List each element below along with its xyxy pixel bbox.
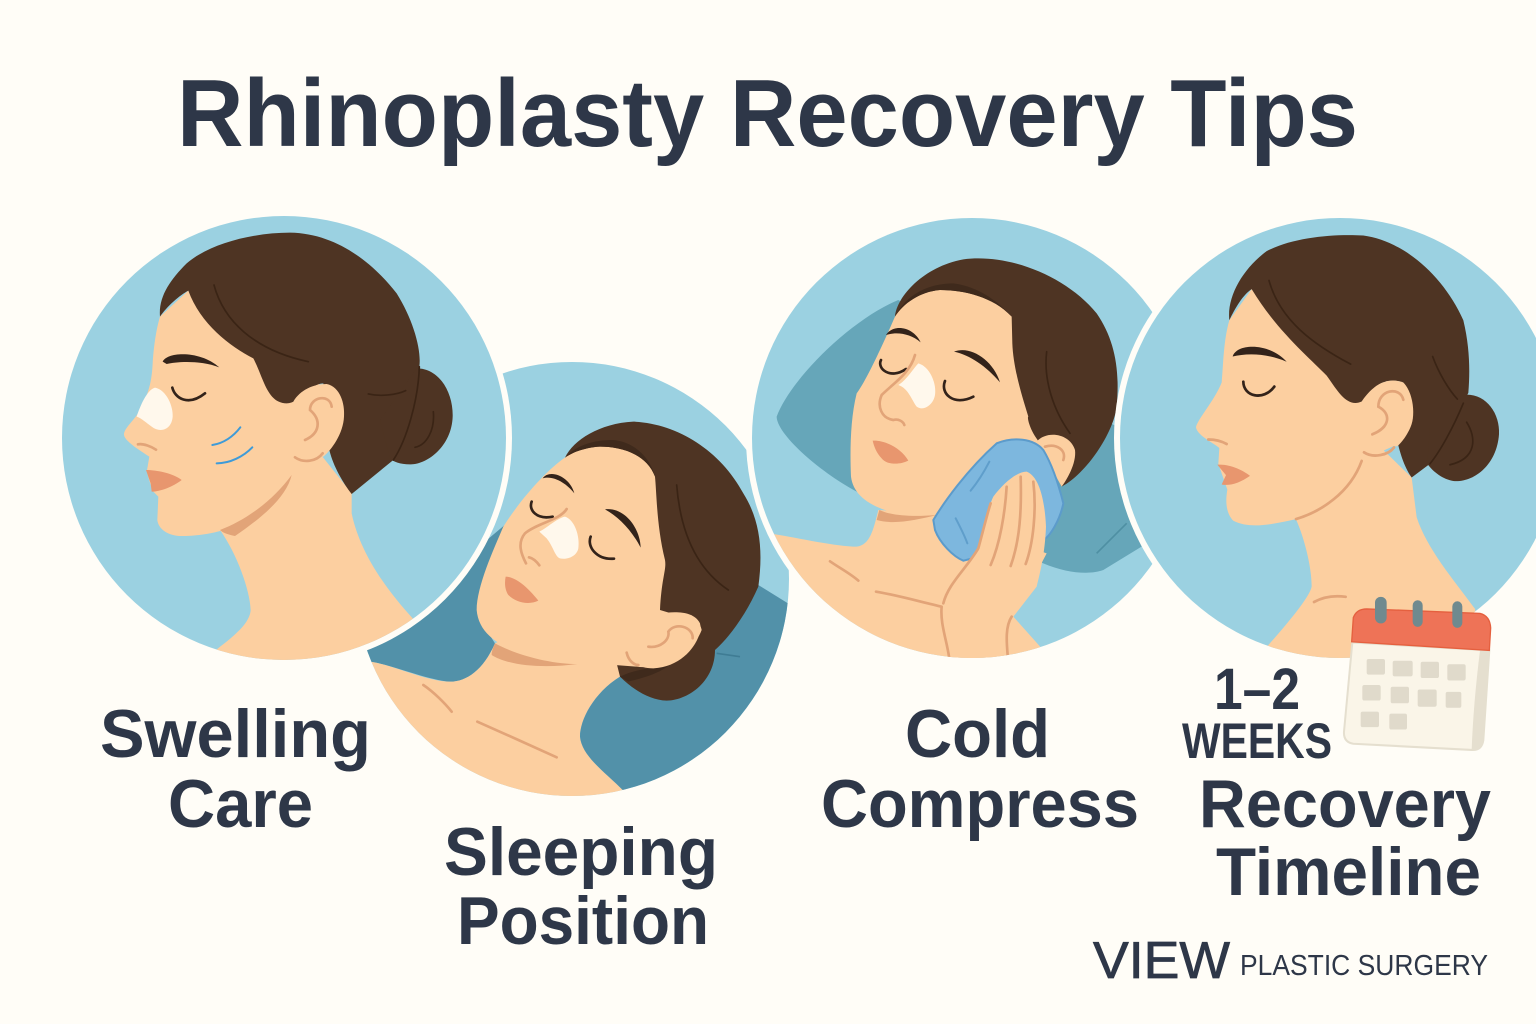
label: cold compress: Compress bbox=[821, 766, 1139, 842]
label: sleeping position bbox=[444, 814, 718, 959]
logo: view plastic surgery: VIEW bbox=[1093, 932, 1230, 990]
logo: view plastic surgery bbox=[1093, 932, 1488, 990]
label: recovery timeline: Recovery bbox=[1199, 766, 1491, 842]
logo: view plastic surgery: PLASTIC SURGERY bbox=[1240, 950, 1488, 982]
label: swelling care: Care bbox=[168, 766, 313, 842]
label: 1-2 weeks: WEEKS bbox=[1182, 713, 1332, 769]
label: cold compress: Cold bbox=[905, 696, 1050, 772]
panel: swelling care illustration bbox=[56, 210, 512, 667]
title: Rhinoplasty Recovery Tips bbox=[177, 60, 1358, 167]
label: recovery timeline bbox=[1199, 766, 1491, 910]
panel: recovery timeline illustration bbox=[1114, 212, 1536, 683]
hand holding compress bbox=[941, 472, 1046, 667]
icon: calendar bbox=[1344, 597, 1491, 750]
label: sleeping position: Sleeping bbox=[444, 814, 718, 890]
label: sleeping position: Position bbox=[457, 883, 709, 959]
label: swelling care bbox=[100, 696, 371, 842]
label: recovery timeline: Timeline bbox=[1216, 834, 1481, 910]
label: 1-2 weeks bbox=[1182, 657, 1332, 769]
icon: cold compress pack bbox=[933, 439, 1063, 561]
label: swelling care: Swelling bbox=[100, 696, 371, 772]
label: 1-2 weeks: 1–2 bbox=[1214, 657, 1300, 722]
panel: cold compress illustration bbox=[746, 218, 1152, 658]
label: cold compress bbox=[821, 696, 1139, 842]
panel: sleeping position illustration bbox=[350, 360, 800, 807]
